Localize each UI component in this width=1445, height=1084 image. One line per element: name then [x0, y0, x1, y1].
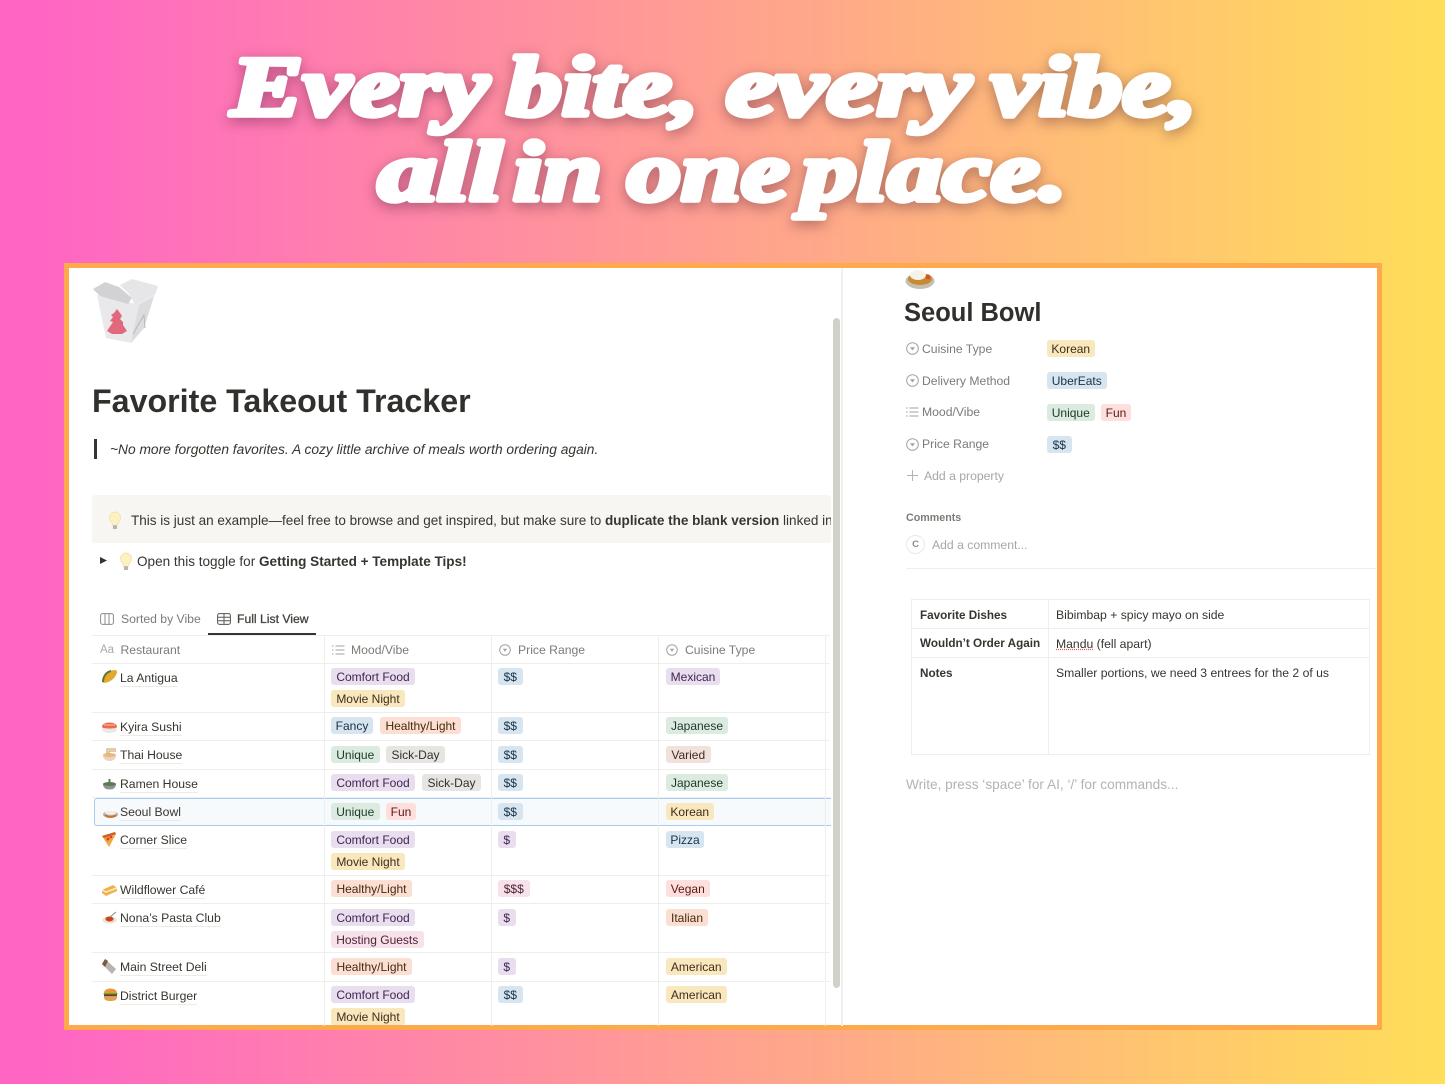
comment avatar: C — [912, 539, 919, 550]
row: Seoul Bowl (selected): Seoul Bowl — [120, 805, 181, 819]
row: La Antigua: Movie Night — [336, 692, 400, 706]
row: Wildflower Café: Wildflower Café — [120, 883, 205, 897]
property: delivery method — [906, 372, 1107, 389]
row: Corner Slice: Corner Slice — [120, 833, 187, 847]
icon: light bulb — [109, 512, 121, 529]
property: price range: $$ — [1053, 438, 1066, 452]
property: cuisine type: Korean — [1051, 342, 1090, 356]
column: restaurant: Restaurant — [120, 643, 180, 657]
comments section — [906, 509, 1376, 569]
row: wouldn't order again: Mandu (fell apart) — [1056, 637, 1152, 651]
row: Wildflower Café: Healthy/Light — [336, 882, 407, 896]
page title: Favorite Takeout Tracker — [92, 383, 471, 419]
row: Corner Slice: $ — [503, 833, 510, 847]
row: La Antigua: La Antigua — [120, 671, 178, 685]
row: Seoul Bowl (selected): Fun — [391, 805, 411, 819]
row: Main Street Deli: American — [671, 960, 722, 974]
icon: toggle bulb — [120, 552, 132, 570]
row: Seoul Bowl (selected): Unique — [336, 805, 374, 819]
icon: toggle arrow — [100, 557, 107, 564]
row: Main Street Deli: Main Street Deli — [120, 960, 207, 974]
column: price range: Price Range — [518, 643, 585, 657]
column: mood/vibe: Mood/Vibe — [351, 643, 409, 657]
row: District Burger: District Burger — [120, 989, 197, 1003]
placeholder text: Write, press ‘space’ for AI, ‘/’ for commands... — [906, 777, 1178, 792]
row: Ramen House: Comfort Food — [336, 776, 410, 790]
row: Wildflower Café: Vegan — [671, 882, 705, 896]
comment input: Add a comment... — [932, 538, 1028, 552]
row: Nona's Pasta Club: Hosting Guests — [336, 933, 418, 947]
row: Thai House: Varied — [671, 748, 705, 762]
row: Corner Slice: Pizza — [670, 833, 700, 847]
row: Nona's Pasta Club: $ — [503, 911, 510, 925]
row: Main Street Deli: $ — [503, 960, 510, 974]
table header — [92, 635, 830, 664]
icon: rice and curry plate — [906, 270, 934, 289]
row: Seoul Bowl (selected) — [94, 798, 831, 826]
row: Main Street Deli — [92, 953, 830, 982]
add a property: Add a property — [924, 469, 1004, 483]
row: District Burger — [104, 986, 727, 1025]
title: all — [378, 125, 503, 219]
panel: notion screenshot frame — [64, 263, 1382, 1030]
row: Main Street Deli: Healthy/Light — [336, 960, 407, 974]
property: delivery method: UberEats — [1052, 374, 1102, 388]
row: wouldn't order again — [920, 637, 1152, 651]
view tabs — [100, 612, 316, 635]
row: Kyira Sushi: $$ — [504, 719, 517, 733]
row: notes: Notes — [920, 667, 952, 680]
notes table — [911, 599, 1370, 755]
row: Ramen House: Sick-Day — [427, 776, 476, 790]
title: vibe, — [991, 40, 1197, 134]
property: delivery method: Delivery Method — [922, 374, 1010, 388]
row: Kyira Sushi: Healthy/Light — [385, 719, 456, 733]
row: Corner Slice — [92, 826, 830, 876]
row: Wildflower Café: $$$ — [504, 882, 524, 896]
title — [222, 40, 1198, 233]
title: place. — [793, 125, 1067, 219]
property: mood/vibe — [906, 404, 1131, 421]
row: Ramen House: Japanese — [671, 776, 723, 790]
title: bite, — [507, 40, 699, 134]
property: mood/vibe: Fun — [1106, 406, 1126, 420]
properties list — [906, 340, 1131, 483]
row: Kyira Sushi — [92, 713, 830, 741]
toggle: Open this toggle for Getting Started + Template Tips! — [137, 554, 467, 569]
detail page title: Seoul Bowl — [904, 299, 1041, 327]
property: mood/vibe: Mood/Vibe — [922, 405, 980, 419]
row: favorite dishes: Favorite Dishes — [920, 609, 1007, 622]
row: La Antigua: Mexican — [671, 670, 715, 684]
row: favorite dishes — [920, 608, 1224, 622]
row: notes: Smaller portions, we need 3 entrees for the 2 of us — [1056, 666, 1329, 680]
column: restaurant: Aa — [100, 644, 114, 656]
row: notes — [920, 666, 1329, 680]
row: Seoul Bowl (selected): $$ — [504, 805, 517, 819]
row: Corner Slice: Comfort Food — [336, 833, 410, 847]
row: Wildflower Café — [92, 876, 830, 904]
tab: full list view — [208, 606, 316, 635]
comments heading: Comments — [906, 512, 961, 524]
row: Ramen House: Ramen House — [120, 777, 198, 791]
comment avatar — [906, 535, 925, 554]
row: Thai House — [92, 741, 830, 770]
property: mood/vibe: Unique — [1052, 406, 1090, 420]
row: Ramen House — [92, 770, 830, 798]
row: Nona's Pasta Club: Italian — [671, 911, 703, 925]
row: Seoul Bowl (selected): Korean — [670, 805, 709, 819]
row: Kyira Sushi: Kyira Sushi — [120, 720, 182, 734]
property: cuisine type: Cuisine Type — [922, 342, 992, 356]
title: every — [726, 40, 971, 134]
row: District Burger: American — [671, 988, 722, 1002]
column: cuisine type: Cuisine Type — [685, 643, 755, 657]
row: La Antigua: $$ — [504, 670, 517, 684]
row: wouldn't order again: Wouldn’t Order Again — [920, 637, 1040, 650]
scrollbar — [833, 318, 840, 988]
row: Ramen House: $$ — [504, 776, 517, 790]
property: price range: Price Range — [922, 437, 989, 451]
row: Thai House: Unique — [336, 748, 374, 762]
panel divider — [841, 268, 843, 1026]
quote block: ~No more forgotten favorites. A cozy little archive of meals worth ordering again. — [110, 442, 598, 457]
callout — [92, 495, 831, 543]
row: La Antigua: Comfort Food — [336, 670, 410, 684]
row: District Burger: Comfort Food — [336, 988, 410, 1002]
title: in — [513, 125, 602, 219]
property: price range — [906, 436, 1072, 453]
row: District Burger: $$ — [504, 988, 517, 1002]
row: Thai House: Thai House — [120, 748, 182, 762]
title: Every — [230, 40, 489, 134]
row: favorite dishes: Bibimbap + spicy mayo on side — [1056, 608, 1224, 622]
title: one — [627, 125, 789, 219]
icon: takeout box — [93, 279, 158, 343]
row: Thai House: $$ — [504, 748, 517, 762]
property: cuisine type — [906, 340, 1095, 357]
row: District Burger: Movie Night — [336, 1010, 400, 1024]
row: Nona's Pasta Club: Comfort Food — [336, 911, 410, 925]
row: Nona's Pasta Club: Nona’s Pasta Club — [120, 911, 221, 925]
row: La Antigua — [92, 664, 830, 713]
tab: full list view: Full List View — [237, 612, 309, 626]
row: Kyira Sushi: Japanese — [671, 719, 723, 733]
row: Kyira Sushi: Fancy — [336, 719, 368, 733]
row: Thai House: Sick-Day — [391, 748, 440, 762]
row: Nona's Pasta Club — [92, 904, 830, 953]
tab: sorted by vibe: Sorted by Vibe — [121, 612, 201, 626]
table: restaurants — [92, 635, 831, 1026]
row: Corner Slice: Movie Night — [336, 855, 400, 869]
